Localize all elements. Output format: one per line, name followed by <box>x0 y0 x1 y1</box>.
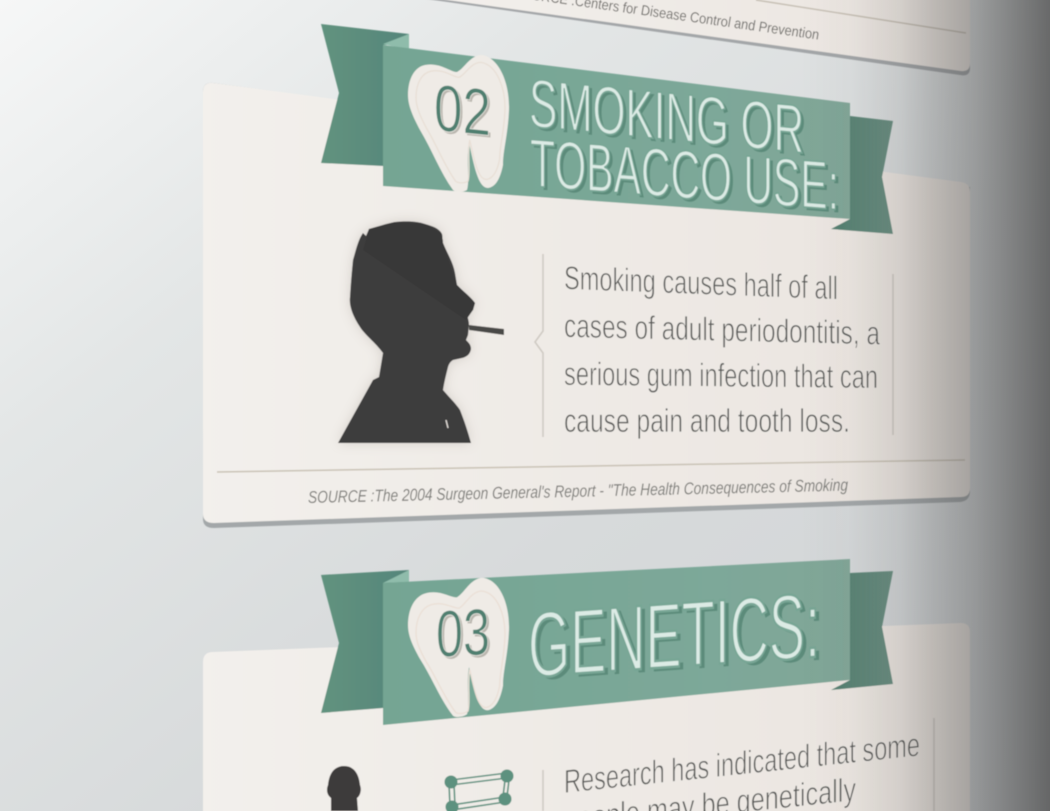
heading: smoking or tobacco use: TOBACCO USE: <box>533 128 842 228</box>
text block: smoking facts: Smoking causes half of all <box>564 259 838 306</box>
ribbon left tail <box>321 570 409 713</box>
icon: tooth with number 03: 03 <box>436 594 490 671</box>
heading: genetics: GENETICS: <box>528 574 820 697</box>
icon: tooth with number 03 <box>408 575 509 722</box>
icon: dna strand <box>444 770 514 811</box>
divider with pointer <box>535 254 543 437</box>
heading: genetics: GENETICS: <box>532 577 824 700</box>
icon: smoker silhouette <box>338 221 504 443</box>
ribbon main band <box>383 45 850 219</box>
panel: top card (previous section) <box>405 0 970 75</box>
text block: smoking facts <box>564 259 880 439</box>
ribbon left tail <box>321 24 409 166</box>
text block: genetics facts <box>564 727 920 811</box>
icon: tooth with number 02: 02 <box>434 71 491 151</box>
source text: smoking: SOURCE :The 2004 Surgeon General's Report - "The Health Consequences of Smoking <box>308 476 848 507</box>
heading: genetics <box>528 574 824 700</box>
divider left <box>542 770 544 811</box>
heading: smoking or tobacco use <box>529 65 842 228</box>
heading: smoking or tobacco use: SMOKING OR <box>529 65 804 168</box>
icon: tooth with number 02 <box>408 55 509 192</box>
heading: smoking or tobacco use: SMOKING OR <box>532 68 807 171</box>
divider right <box>933 718 935 811</box>
panel: genetics <box>203 559 970 811</box>
ribbon right tail <box>831 571 893 690</box>
ribbon: 03 heading <box>321 559 893 725</box>
ribbon main band <box>383 559 850 725</box>
text block: smoking facts: serious gum infection that can <box>564 355 878 395</box>
icon: head silhouette <box>327 766 361 811</box>
ribbon fold <box>383 570 409 583</box>
icon: tooth with number 03: 03 <box>438 596 492 673</box>
text block: genetics facts: Research has indicated that some <box>564 727 920 801</box>
icon: tooth with number 02: 02 <box>436 73 493 153</box>
panel: smoking or tobacco use <box>203 24 970 528</box>
lighting overlay <box>800 0 1050 811</box>
heading: smoking or tobacco use: TOBACCO USE: <box>530 125 839 225</box>
ribbon: 02 heading <box>321 24 893 234</box>
text block: smoking facts: cases of adult periodontitis, a <box>564 307 880 352</box>
ribbon right tail <box>831 116 893 234</box>
text block: smoking facts: cause pain and tooth loss. <box>564 402 850 439</box>
divider right <box>892 274 894 435</box>
ribbon fold <box>383 34 409 50</box>
